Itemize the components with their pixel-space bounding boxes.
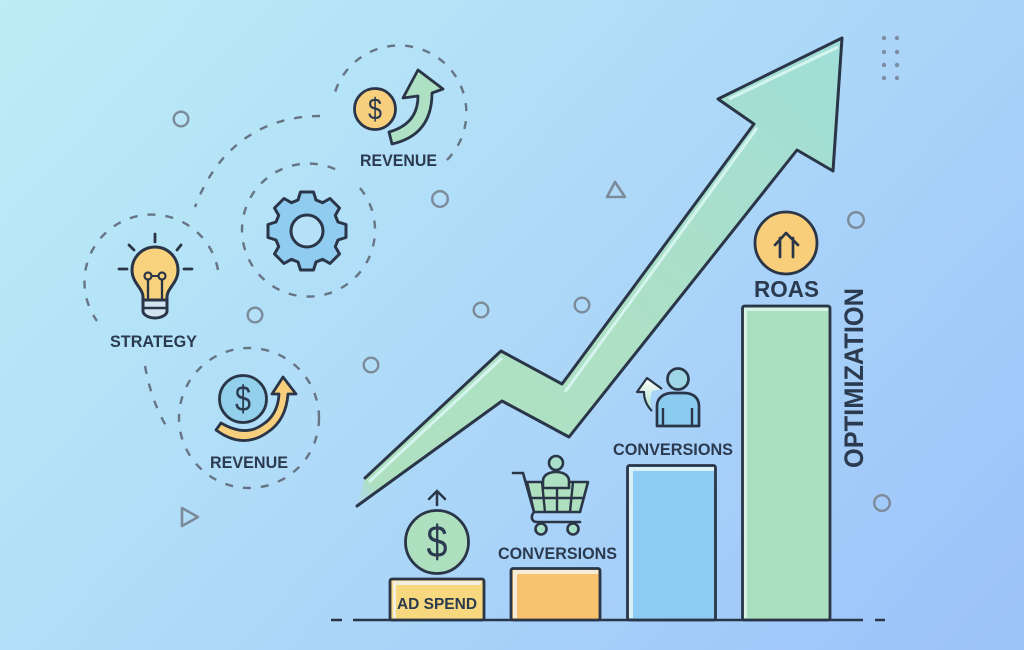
label: roas: ROAS [754,276,819,302]
decorative triangles [182,182,625,526]
top revenue icon [354,70,443,144]
bar: conversions orange [511,568,600,620]
label: revenue top: REVENUE [360,151,437,170]
bar: ad spend [390,579,484,620]
label: optimization: OPTIMIZATION [839,288,869,468]
icon: gear [268,192,346,270]
icon: blue dollar coin: $ [235,378,251,419]
label: revenue bottom: REVENUE [210,453,288,472]
label: conversions upper: CONVERSIONS [613,441,733,459]
icon: person with small arrow [637,368,699,426]
bottom revenue icon [216,376,296,441]
decorative small circles [174,112,890,511]
baseline [331,619,885,621]
bar: conversions blue [628,466,716,620]
icon: green up arrow [389,70,443,144]
icon: yellow curved arrow [216,377,296,441]
bar: roas green [742,306,830,620]
icon: light bulb [119,234,192,318]
label: conversions lower: CONVERSIONS [498,545,617,563]
icon: green dollar coin with up arrow [406,491,468,574]
dashed connector paths [84,45,466,488]
label: strategy: STRATEGY [110,333,197,351]
icon: dollar coin: $ [368,92,382,126]
decorative dot grid [882,36,899,80]
label: ad spend: AD SPEND [397,596,477,613]
large growth arrow [357,38,842,506]
icon: shopping cart with person [513,456,588,534]
icon: green dollar coin with up arrow: $ [426,516,448,567]
icon: roas coin with up arrows [755,212,817,274]
